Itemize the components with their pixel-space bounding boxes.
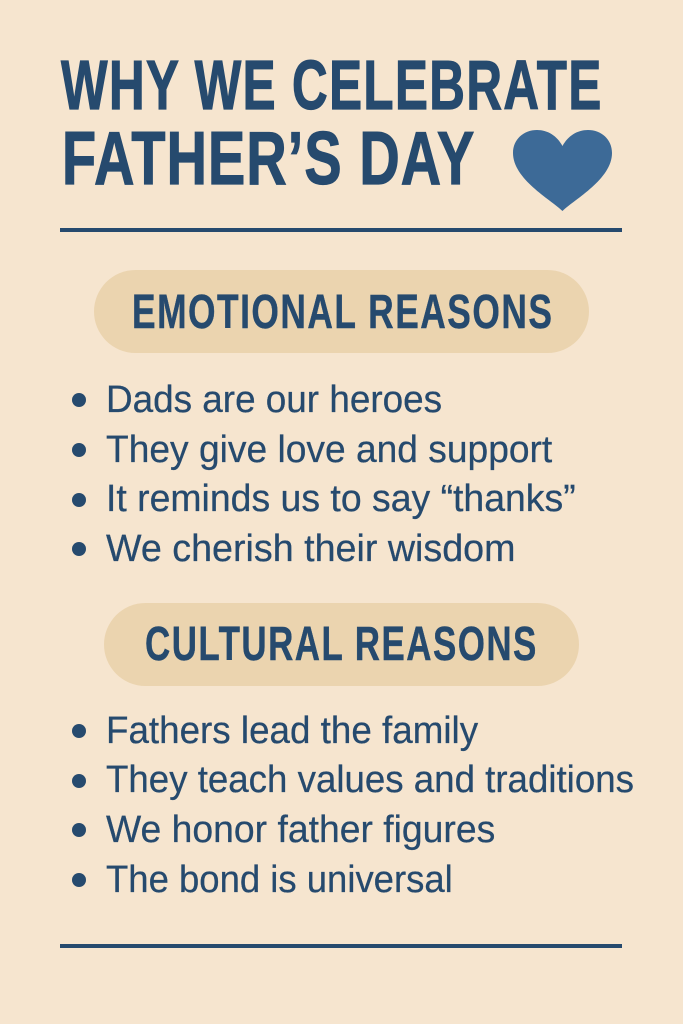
list: cultural reasons: Fathers lead the family <box>106 710 478 752</box>
list: cultural reasons: We honor father figures <box>106 809 495 851</box>
title <box>60 46 603 200</box>
title: WHY WE CELEBRATE <box>61 46 603 124</box>
panel: emotional reasons heading: EMOTIONAL REASONS <box>132 286 553 339</box>
panel: emotional reasons heading <box>94 270 589 353</box>
list: cultural reasons <box>72 710 634 901</box>
title: FATHER’S DAY <box>62 116 475 200</box>
icon: heart <box>513 130 612 211</box>
list: cultural reasons: They teach values and traditions <box>106 759 634 801</box>
list: cultural reasons: The bond is universal <box>106 859 453 901</box>
list: emotional reasons: Dads are our heroes <box>106 379 442 421</box>
list: emotional reasons <box>72 379 576 570</box>
panel: cultural reasons heading: CULTURAL REASONS <box>145 618 538 671</box>
list: emotional reasons: They give love and support <box>106 429 552 471</box>
list: emotional reasons: We cherish their wisdom <box>106 528 515 570</box>
list: emotional reasons: It reminds us to say “thanks” <box>106 478 576 520</box>
panel: cultural reasons heading <box>104 603 579 686</box>
